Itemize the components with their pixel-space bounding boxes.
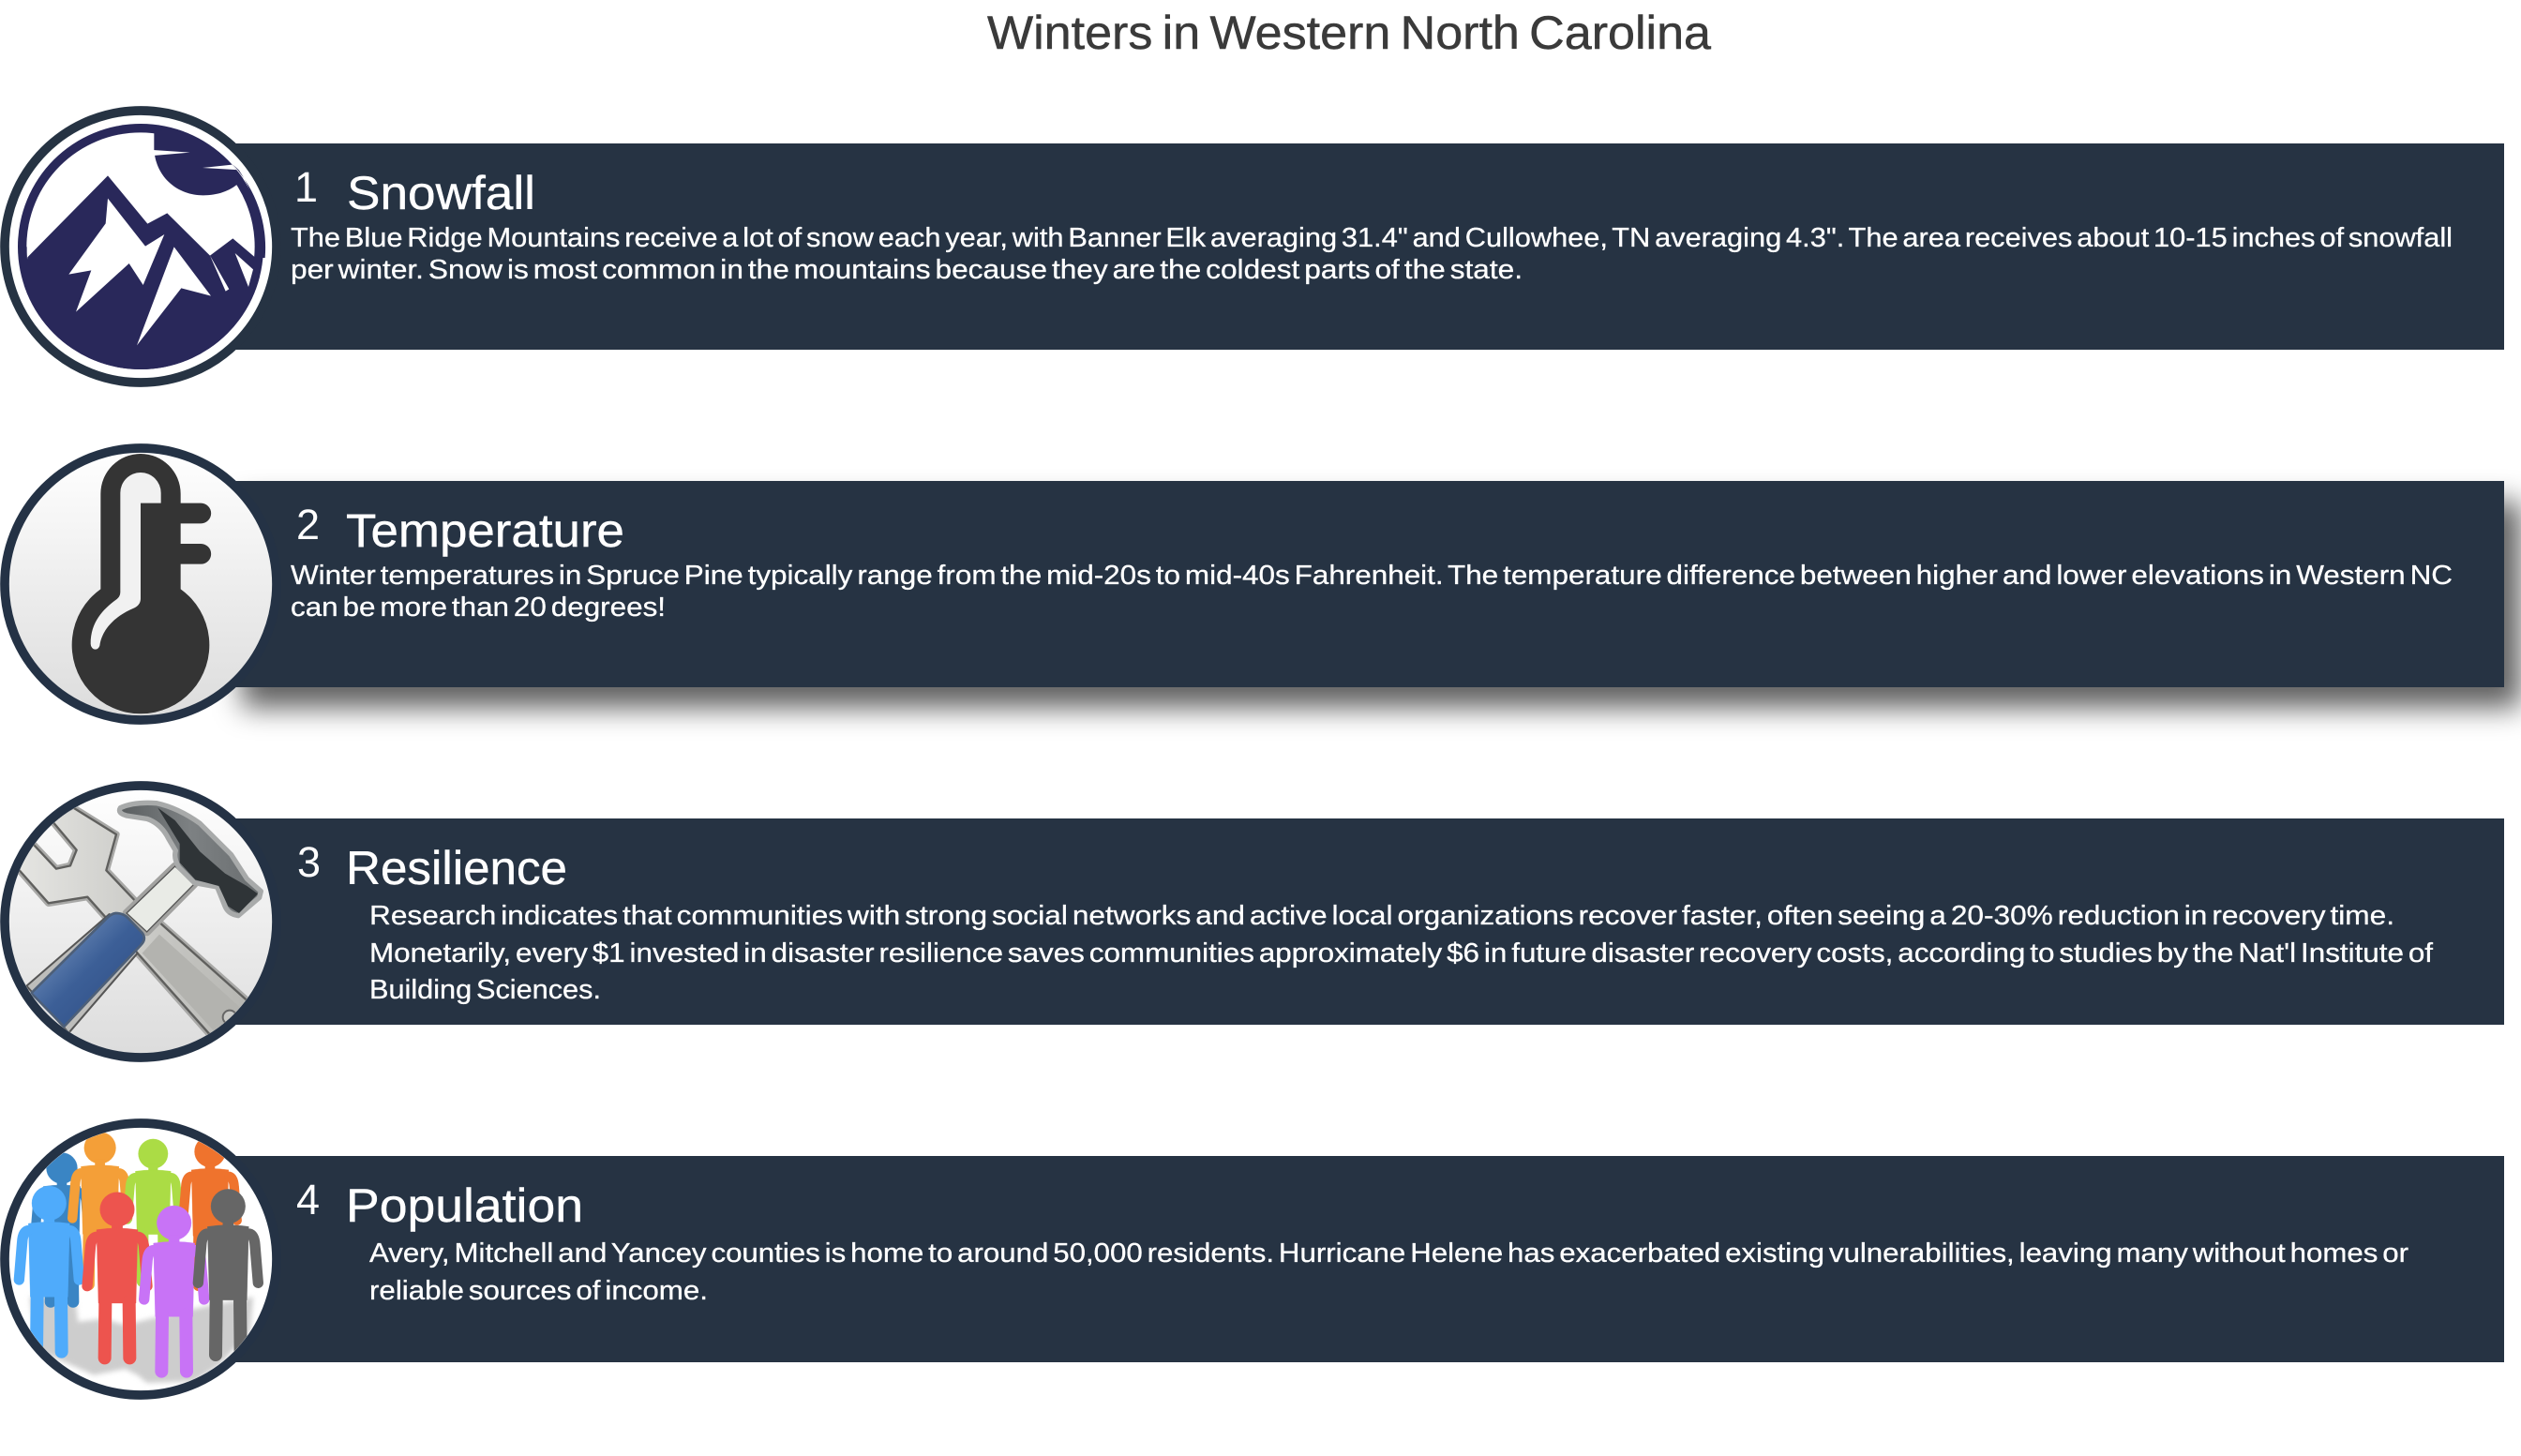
heading: snowfall: Snowfall (347, 167, 535, 219)
number 3: 3 (297, 838, 321, 886)
text block: resilience (369, 901, 2434, 1005)
panel: snowfall (5, 111, 2504, 383)
panel shadow: temperature (242, 502, 2521, 708)
number 2: 2 (296, 501, 320, 548)
icon: mountains and moon (5, 111, 281, 383)
text block: temperature: can be more than 20 degrees! (291, 593, 666, 623)
text block: temperature: Winter temperatures in Spruce Pine typically range from the mid-20s to mid-40s Fahrenheit. The temperature difference between higher and lower elevations in Western NC (291, 561, 2453, 591)
text block: snowfall: The Blue Ridge Mountains receive a lot of snow each year, with Banner Elk averaging 31.4" and Cullowhee, TN averaging 4.3". The area receives about 10-15 inches of snowfall (291, 223, 2453, 253)
number 1: 1 (294, 163, 318, 211)
heading: temperature: Temperature (346, 504, 624, 557)
title: Winters in Western North Carolina (987, 7, 1711, 59)
panel: population (5, 1123, 2504, 1395)
panel background: temperature (225, 481, 2504, 687)
icon: group of people (5, 1123, 277, 1395)
icon: hammer and wrench (5, 786, 277, 1058)
text block: population: reliable sources of income. (369, 1276, 708, 1306)
heading: population: Population (346, 1179, 583, 1232)
panel: resilience (5, 786, 2504, 1058)
text block: snowfall (291, 223, 2453, 285)
panel: temperature (5, 448, 2521, 720)
heading: resilience: Resilience (346, 842, 567, 894)
text block: snowfall: per winter. Snow is most common in the mountains because they are the coldest parts of the state. (291, 255, 1523, 285)
text block: resilience: Research indicates that communities with strong social networks and active local organizations recover faster, often seeing a 20-30% reduction in recovery time. (369, 901, 2394, 931)
text block: population (369, 1238, 2408, 1306)
panel background: resilience (225, 818, 2504, 1025)
panel background: population (225, 1156, 2504, 1362)
text block: population: Avery, Mitchell and Yancey counties is home to around 50,000 residents. Hurricane Helene has exacerbated existing vulnerabilities, leaving many without homes or (369, 1238, 2408, 1268)
text block: resilience: Building Sciences. (369, 975, 601, 1005)
number 4: 4 (296, 1176, 320, 1223)
panel background: snowfall (225, 143, 2504, 350)
text block: resilience: Monetarily, every $1 invested in disaster resilience saves communities approximately $6 in future disaster recovery costs, according to studies by the Nat'l Institute of (369, 938, 2434, 968)
text block: temperature (291, 561, 2453, 623)
icon: thermometer (5, 448, 277, 720)
